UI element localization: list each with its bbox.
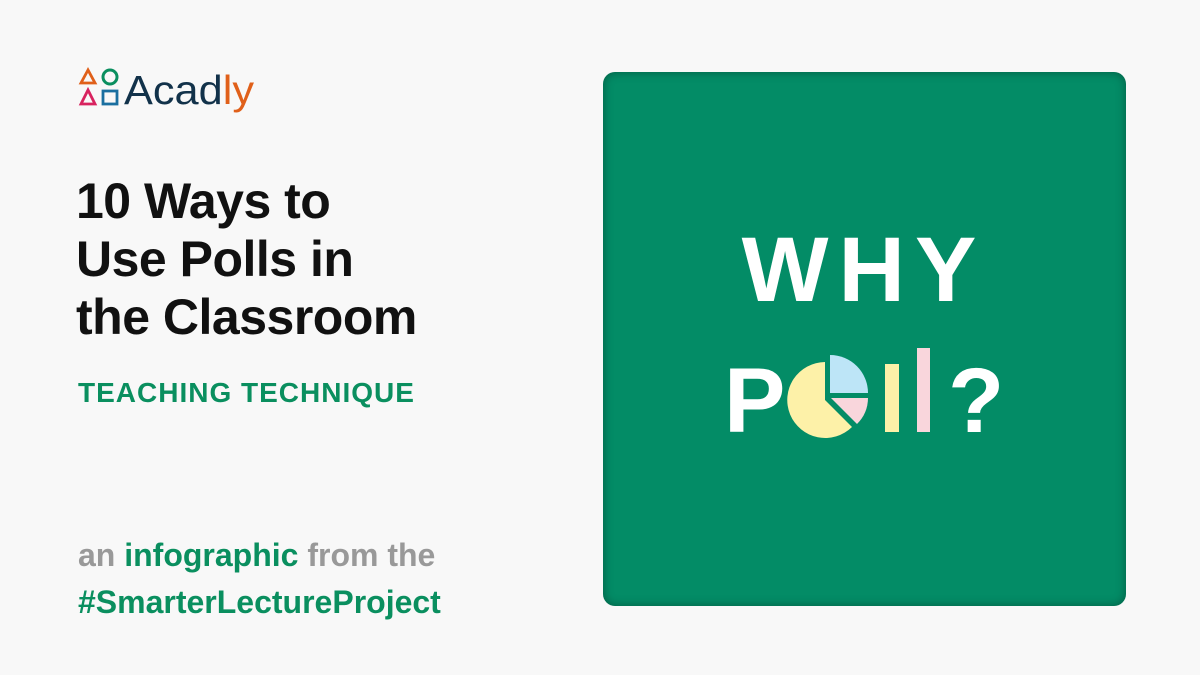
footer text — [78, 537, 441, 620]
title: the Classroom — [76, 289, 417, 345]
subtitle: TEACHING TECHNIQUE — [78, 377, 415, 408]
heading: POLL: P — [724, 350, 785, 452]
logo: Acadly — [124, 67, 255, 113]
heading: WHY: WHY — [742, 219, 986, 321]
footer text: an infographic from the — [78, 537, 435, 573]
title: 10 Ways to — [76, 173, 330, 229]
footer text: #SmarterLectureProject — [78, 584, 441, 620]
icon: logo shapes — [81, 70, 117, 104]
title: Use Polls in — [76, 231, 353, 287]
title — [76, 173, 417, 345]
heading: POLL: ? — [948, 350, 1004, 452]
heading: POLL — [724, 348, 1004, 452]
panel: why poll — [603, 72, 1126, 606]
